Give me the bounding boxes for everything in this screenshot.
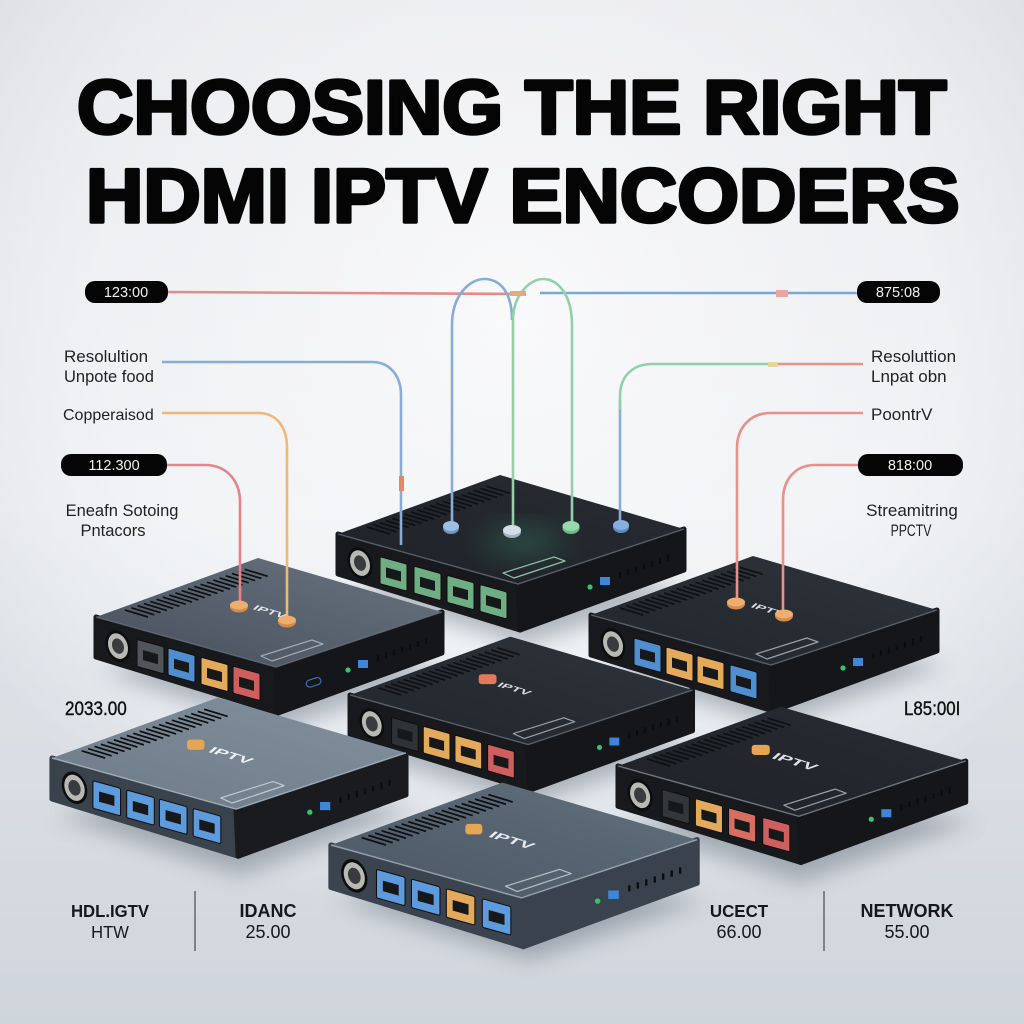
left label: streaming: Pntacors	[80, 522, 146, 540]
cable: red to left device	[167, 465, 240, 605]
right label: pointer: PoontrV	[871, 405, 933, 424]
pill: top right value: 875:08	[876, 285, 920, 301]
device shadows	[55, 560, 975, 960]
pill: top left value: 123:00	[104, 285, 148, 301]
chip and IPTV mark: IPTV	[205, 746, 256, 766]
right label: resolution	[871, 347, 956, 386]
device: centre encoder	[350, 637, 693, 790]
left label: resolution	[64, 347, 154, 386]
bottom stat: HDL.IGTV	[71, 900, 149, 942]
ports	[137, 639, 260, 701]
side value: left: 2033.00	[65, 698, 127, 719]
right label: streaming: PPCTV	[891, 522, 931, 541]
bottom stat: IDANC: IDANC	[240, 901, 296, 921]
right label: streaming: Streamitring	[866, 501, 958, 520]
pill: right middle value	[858, 454, 963, 476]
ports	[634, 638, 757, 699]
side value: right: L85:00I	[904, 698, 960, 719]
bottom stat: NETWORK: NETWORK	[860, 901, 954, 921]
cable: green loop	[513, 279, 572, 525]
cable: red from right pill	[783, 465, 858, 615]
left label: streaming: Eneafn Sotoing	[66, 502, 178, 520]
cable: orange to left device	[162, 413, 287, 620]
cable: red to right device	[737, 413, 863, 603]
bottom stat: UCECT: UCECT	[710, 901, 768, 921]
right label: resolution: Resoluttion	[871, 347, 956, 366]
cable joints and connectors	[230, 290, 793, 628]
connector glyph	[305, 677, 322, 688]
device: right upper encoder	[591, 556, 937, 711]
title: CHOOSING THE RIGHT	[77, 66, 947, 150]
cable: blue from top right pill	[540, 292, 858, 294]
cables	[162, 279, 863, 620]
pill: left middle value: 112.300	[88, 458, 140, 474]
IPTV mark: IPTV	[748, 602, 789, 618]
left label: resolution: Unpote food	[64, 368, 154, 386]
chip and IPTV mark: IPTV	[495, 681, 535, 697]
chip and IPTV mark	[187, 740, 256, 766]
ports	[392, 717, 514, 778]
ports	[376, 869, 511, 935]
bottom stat: IDANC	[240, 901, 296, 942]
pill: top right value	[857, 281, 940, 303]
cable: blue loop	[452, 279, 512, 523]
device: right lower encoder	[618, 707, 966, 862]
pill: top left value	[85, 281, 168, 303]
title	[77, 66, 960, 239]
chip and IPTV mark	[465, 824, 538, 851]
bottom stat: HDL.IGTV: HTW	[91, 921, 129, 942]
chip and IPTV mark: IPTV	[485, 830, 538, 851]
left label: resolution: Resolultion	[64, 347, 148, 366]
bottom stat: IDANC: 25.00	[245, 922, 291, 942]
chip and IPTV mark	[752, 745, 821, 773]
bottom stat: UCECT	[710, 901, 768, 942]
cable: blue then green to top device	[619, 400, 621, 523]
device: left upper encoder	[96, 558, 442, 713]
device: top centre encoder	[338, 475, 684, 630]
cable: red from top left pill	[167, 292, 513, 294]
left label: comparison: Copperaisod	[63, 407, 154, 424]
device: left lower encoder	[52, 698, 406, 856]
pill: left middle value	[61, 454, 167, 476]
cable: green to tan joint	[620, 364, 768, 410]
ports	[662, 789, 790, 852]
chip and IPTV mark: IPTV	[769, 751, 821, 773]
device: bottom centre encoder	[331, 783, 697, 947]
cable: red to right label	[778, 363, 863, 365]
bottom stat: HDL.IGTV: HDL.IGTV	[71, 900, 149, 921]
green glow on top panel	[483, 528, 563, 556]
right label: streaming	[866, 501, 958, 541]
chip and IPTV mark	[479, 674, 535, 697]
right label: resolution: Lnpat obn	[871, 367, 947, 386]
IPTV mark: IPTV	[250, 604, 291, 620]
left label: streaming	[66, 502, 178, 540]
title: HDMI IPTV ENCODERS	[86, 155, 960, 239]
bottom stat: NETWORK	[860, 901, 954, 942]
bottom stat: UCECT: 66.00	[716, 922, 762, 942]
cable: blue to top device	[162, 362, 401, 545]
green ports	[380, 557, 507, 619]
blue ports	[93, 781, 221, 844]
bottom stat: NETWORK: 55.00	[884, 922, 930, 942]
pill: right middle value: 818:00	[888, 458, 932, 474]
